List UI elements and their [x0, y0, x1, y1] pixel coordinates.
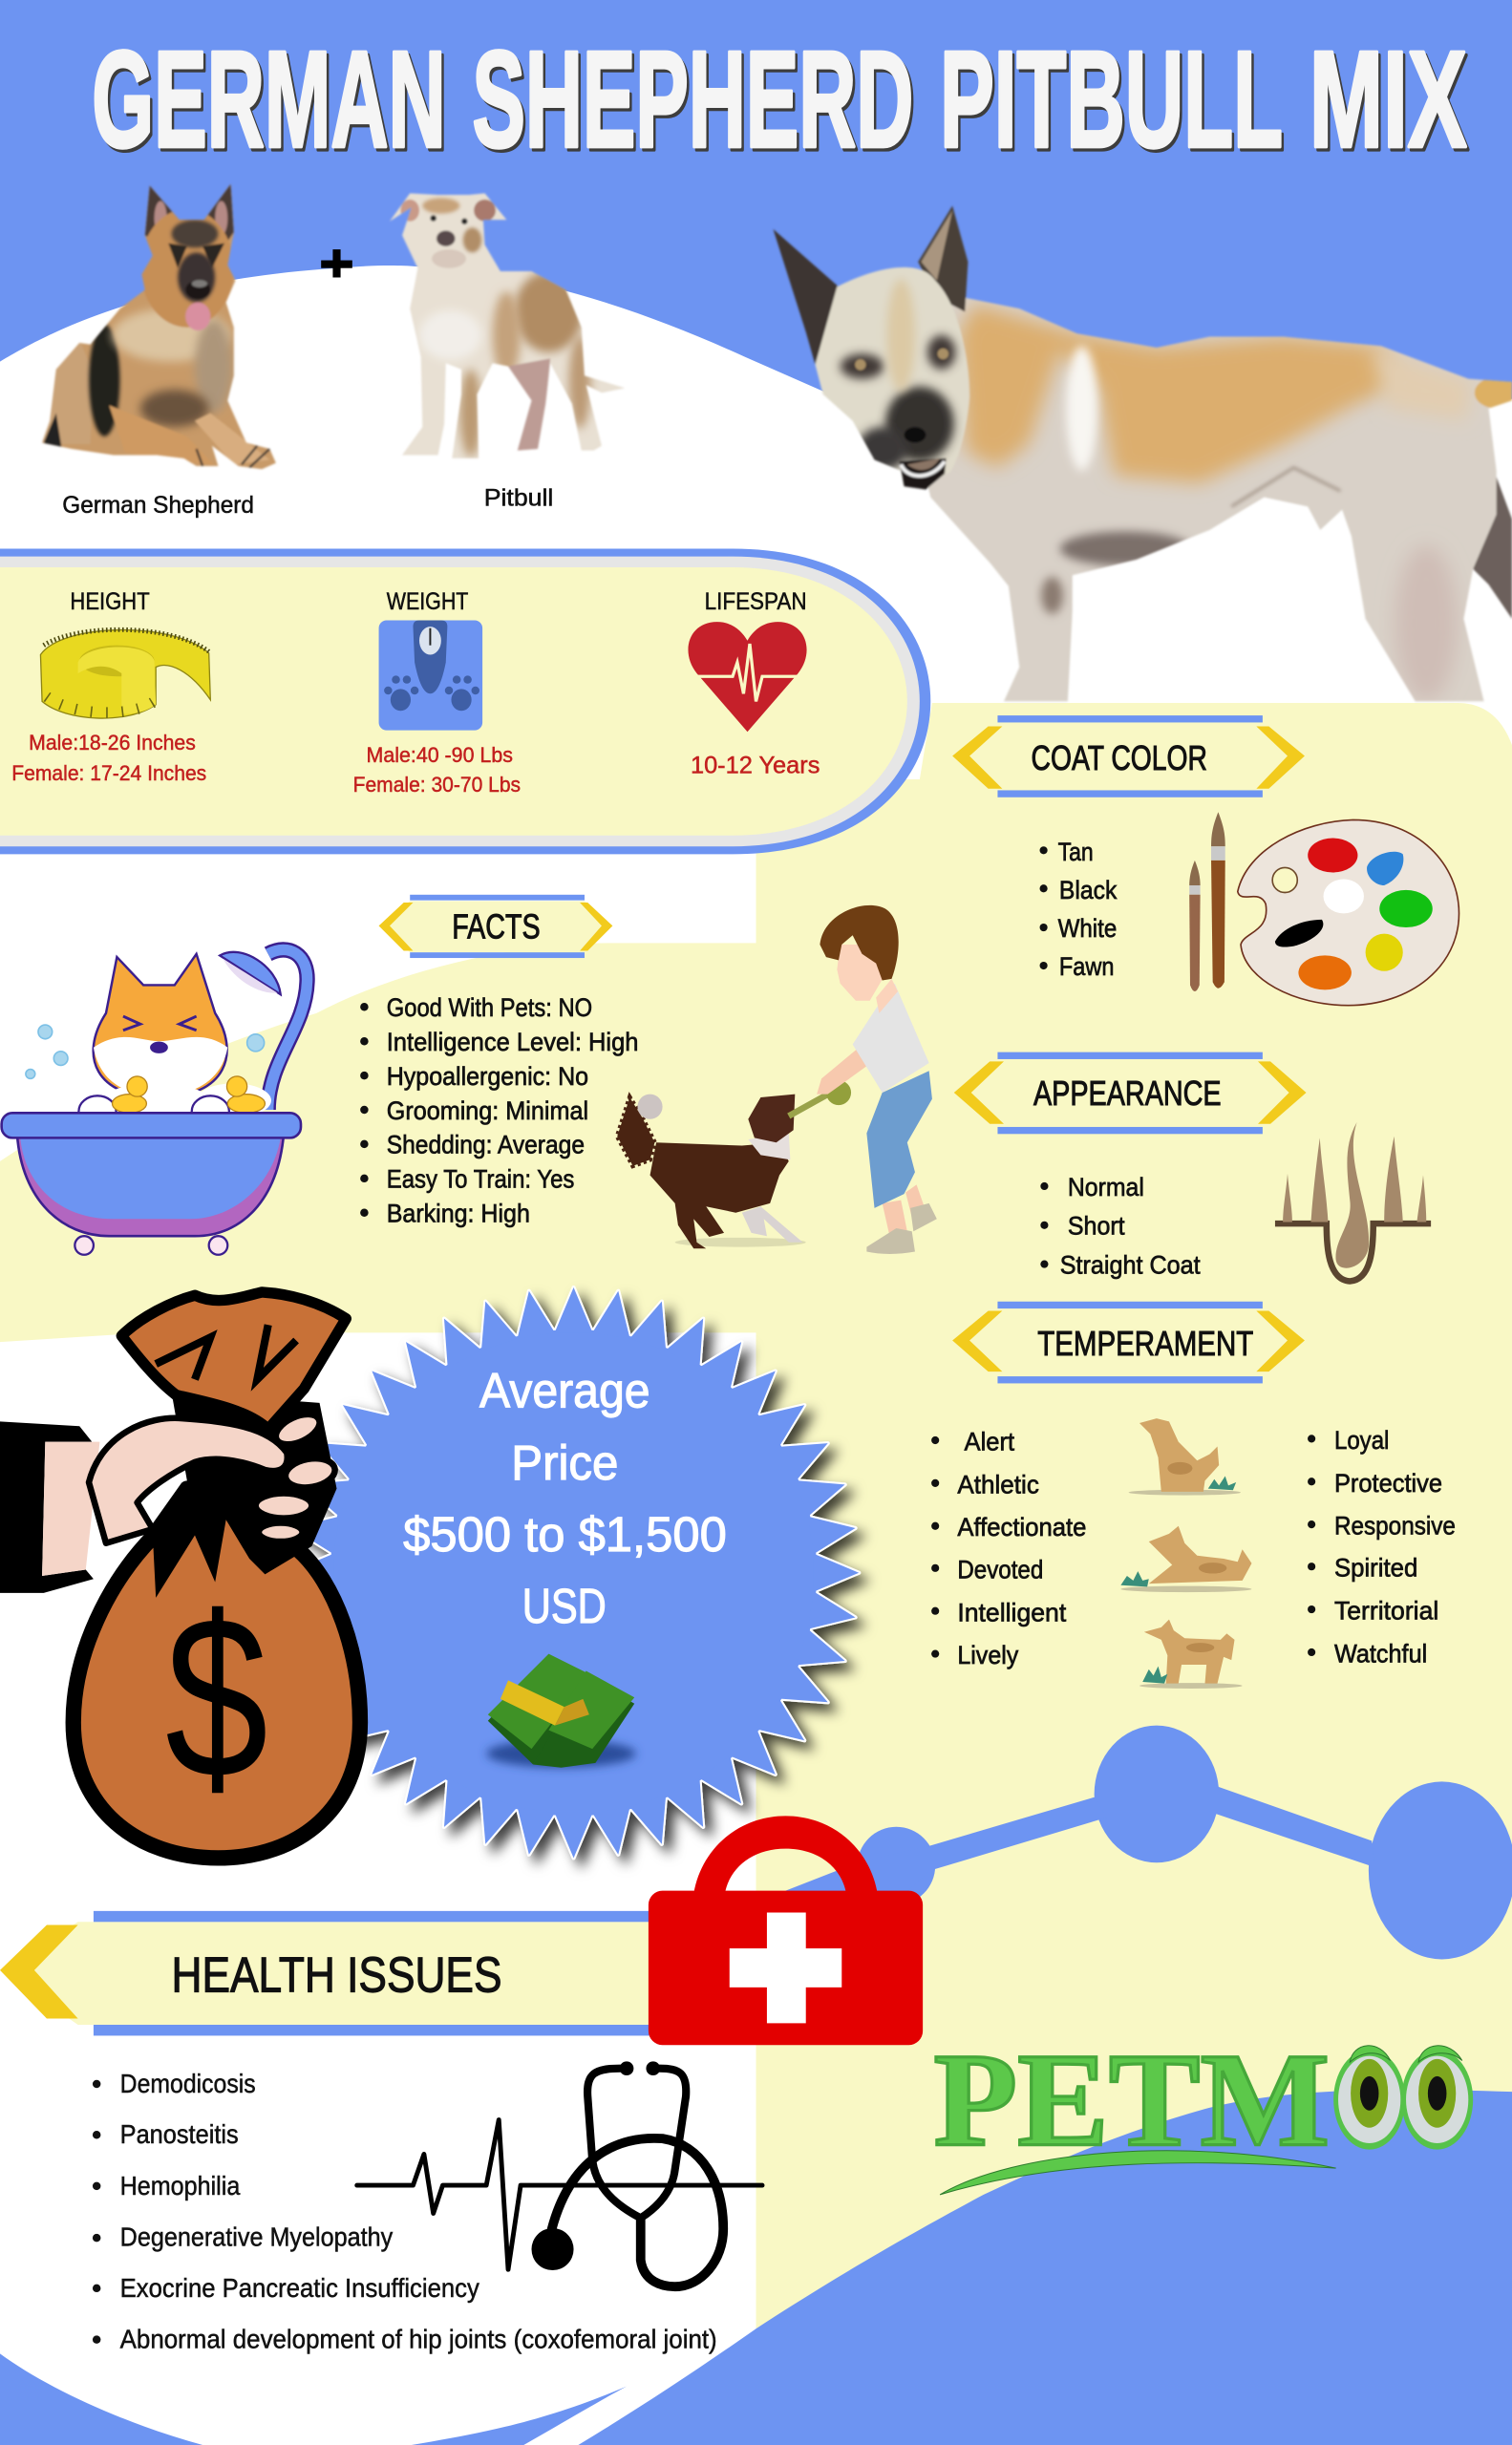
rope toy: [789, 1080, 851, 1116]
list: health issues: Hemophilia: [120, 2171, 241, 2200]
icon: weighing scale with paws: [379, 621, 482, 731]
background: yellow right panel: [756, 703, 1512, 2444]
icon: paint brushes: [1189, 812, 1225, 991]
list: temperament right: Protective: [1334, 1469, 1442, 1498]
list: appearance: Short: [1068, 1212, 1125, 1241]
list: appearance: Straight Coat: [1060, 1250, 1201, 1279]
shower head and pipe: [220, 949, 308, 1110]
dog tail: [617, 1095, 663, 1166]
background: yellow facts section: [0, 943, 756, 1342]
icon: hand holding money bag: [0, 1292, 360, 1858]
list: temperament left: Athletic: [957, 1470, 1039, 1499]
list: health issues: Degenerative Myelopathy: [120, 2222, 393, 2252]
puppy head: [94, 954, 227, 1097]
list: appearance: [1040, 1173, 1201, 1279]
icon: lying dog: [1120, 1526, 1251, 1592]
sleeve: [0, 1421, 94, 1593]
knot shadow behind the hand: [153, 1392, 337, 1598]
list: health issues: Demodicosis: [120, 2069, 256, 2098]
list: coat colors: [1040, 838, 1118, 981]
text: height values: [11, 731, 206, 785]
text: height values: Female: 17-24 Inches: [11, 761, 206, 785]
list: facts: Grooming: Minimal: [387, 1096, 588, 1125]
boy shoes: [866, 1203, 937, 1254]
icon: standing dog: [1139, 1620, 1243, 1689]
list: coat colors: Fawn: [1059, 952, 1115, 981]
boy arm: [817, 1048, 866, 1095]
icon: artist palette: [1238, 819, 1459, 1006]
boy neck: [876, 979, 898, 1013]
title: GERMAN: [95, 27, 448, 180]
list: temperament right: Spirited: [1334, 1554, 1417, 1583]
boy shirt: [853, 984, 929, 1093]
list: coat colors: Tan: [1058, 838, 1094, 866]
logo: PetMoo: [934, 2027, 1473, 2195]
title: SHEPHERD: [475, 27, 916, 180]
boy jeans: [866, 1071, 932, 1208]
price text: USD: [522, 1578, 607, 1633]
icon: sitting dog: [1129, 1418, 1241, 1496]
logo wordmark: PETM: [934, 2027, 1330, 2175]
icon: hair follicle: [1275, 1122, 1431, 1282]
list: temperament left: Devoted: [957, 1555, 1043, 1584]
bag creases: [156, 1325, 296, 1379]
list: health issues: Abnormal development of hip joints (coxofemoral joint): [120, 2325, 717, 2354]
badge: facts: FACTS: [452, 907, 541, 946]
badge: facts: [379, 895, 612, 958]
icon: german shepherd dog: [41, 183, 277, 470]
icon: measuring tape: [40, 629, 210, 718]
bathtub: [2, 1113, 301, 1255]
logo eyes: [1333, 2046, 1473, 2150]
title: PITBULL: [940, 23, 1283, 176]
heading: height: HEIGHT: [70, 588, 150, 615]
text: weight values: [353, 743, 521, 797]
list: facts: Good With Pets: NO: [387, 993, 592, 1022]
list: facts: Intelligence Level: High: [387, 1028, 638, 1056]
badge: health issues: [0, 1911, 671, 2035]
list: temperament right: Loyal: [1334, 1426, 1389, 1455]
icon: puppy in bathtub: [2, 949, 308, 1255]
background: blue wave bottom right: [578, 2090, 1512, 2445]
background: blue sliver bottom: [412, 2387, 627, 2445]
label: German Shepherd: German Shepherd: [62, 492, 254, 519]
badge: health issues: HEALTH ISSUES: [172, 1948, 501, 2004]
panel: stats band: [0, 548, 930, 854]
badge: coat color: [952, 715, 1305, 797]
text: lifespan value: 10-12 Years: [691, 752, 820, 778]
list: facts: Barking: High: [387, 1200, 530, 1228]
icon: pitbull dog: [390, 192, 625, 459]
list: temperament left: Intelligent: [957, 1598, 1067, 1626]
dog head: [748, 1095, 795, 1142]
background: blue connected circles: [786, 1726, 1512, 1959]
list: temperament right: [1308, 1426, 1456, 1668]
text: height values: Male:18-26 Inches: [29, 731, 196, 755]
badge: coat color: COAT COLOR: [1032, 739, 1207, 777]
text: weight values: Female: 30-70 Lbs: [353, 773, 521, 797]
icon: stethoscope with pulse line: [357, 2062, 762, 2286]
dog shadow: [675, 1238, 806, 1247]
price text: Price: [511, 1435, 618, 1490]
list: health issues: Panosteitis: [120, 2119, 239, 2149]
bag body: [74, 1489, 360, 1858]
price text: $500 to $1,500: [403, 1506, 727, 1562]
icon: heart with pulse: [688, 622, 807, 732]
list: coat colors: White: [1058, 914, 1117, 943]
hand: [89, 1418, 287, 1543]
title: SHEPHERD: [472, 23, 913, 176]
label: Pitbull: Pitbull: [484, 485, 553, 512]
icon: money stacks: [486, 1654, 636, 1768]
cuff and arm: [42, 1442, 99, 1576]
list: appearance: Normal: [1068, 1173, 1144, 1201]
title: [92, 23, 1469, 180]
bag top ruffle: [121, 1292, 346, 1430]
icon: red medical kit: [649, 1816, 923, 2045]
list: temperament left: [931, 1427, 1086, 1669]
illustration: boy playing tug with dog: [617, 905, 937, 1254]
list: health issues: Exocrine Pancreatic Insufficiency: [120, 2273, 479, 2303]
heading: lifespan: LIFESPAN: [705, 588, 807, 615]
badge: appearance: [954, 1052, 1307, 1134]
foam: [40, 1083, 271, 1117]
fingers: [256, 1408, 337, 1541]
price starburst: [288, 1287, 859, 1858]
list: temperament right: Responsive: [1334, 1512, 1456, 1541]
list: coat colors: Black: [1059, 876, 1118, 904]
title: PITBULL: [943, 27, 1286, 180]
price text: [403, 1363, 727, 1633]
badge: temperament: TEMPERAMENT: [1037, 1325, 1253, 1363]
list: temperament left: Lively: [957, 1641, 1019, 1669]
background: blue curve bottom left: [0, 2353, 202, 2445]
bubbles: [26, 1025, 265, 1078]
dog body: [650, 1142, 789, 1248]
dollar sign: $: [165, 1569, 268, 1827]
list: facts: [360, 993, 638, 1228]
paws: [78, 1095, 229, 1127]
badge: appearance: APPEARANCE: [1033, 1074, 1222, 1113]
boy hair: [820, 905, 899, 981]
list: temperament left: Affectionate: [957, 1513, 1086, 1541]
logo swoosh: [940, 2151, 1336, 2195]
list: facts: Easy To Train: Yes: [387, 1165, 574, 1194]
text: weight values: Male:40 -90 Lbs: [367, 743, 513, 767]
icon: plus sign: [321, 249, 352, 278]
list: health issues: [93, 2069, 717, 2354]
heading: weight: WEIGHT: [387, 588, 468, 615]
boy face: [837, 945, 885, 1001]
title: GERMAN: [92, 23, 446, 176]
main dog photo: [773, 205, 1512, 710]
ducks: [113, 1076, 265, 1113]
list: temperament right: Territorial: [1334, 1597, 1438, 1626]
list: facts: Shedding: Average: [387, 1131, 585, 1159]
dog white legs: [742, 1206, 802, 1243]
dog collar: [748, 1133, 790, 1159]
price text: Average: [479, 1363, 650, 1418]
list: facts: Hypoallergenic: No: [387, 1062, 588, 1091]
list: temperament left: Alert: [965, 1427, 1015, 1456]
list: temperament right: Watchful: [1334, 1639, 1427, 1668]
badge: temperament: [952, 1302, 1305, 1383]
boy legs: [883, 1184, 927, 1252]
